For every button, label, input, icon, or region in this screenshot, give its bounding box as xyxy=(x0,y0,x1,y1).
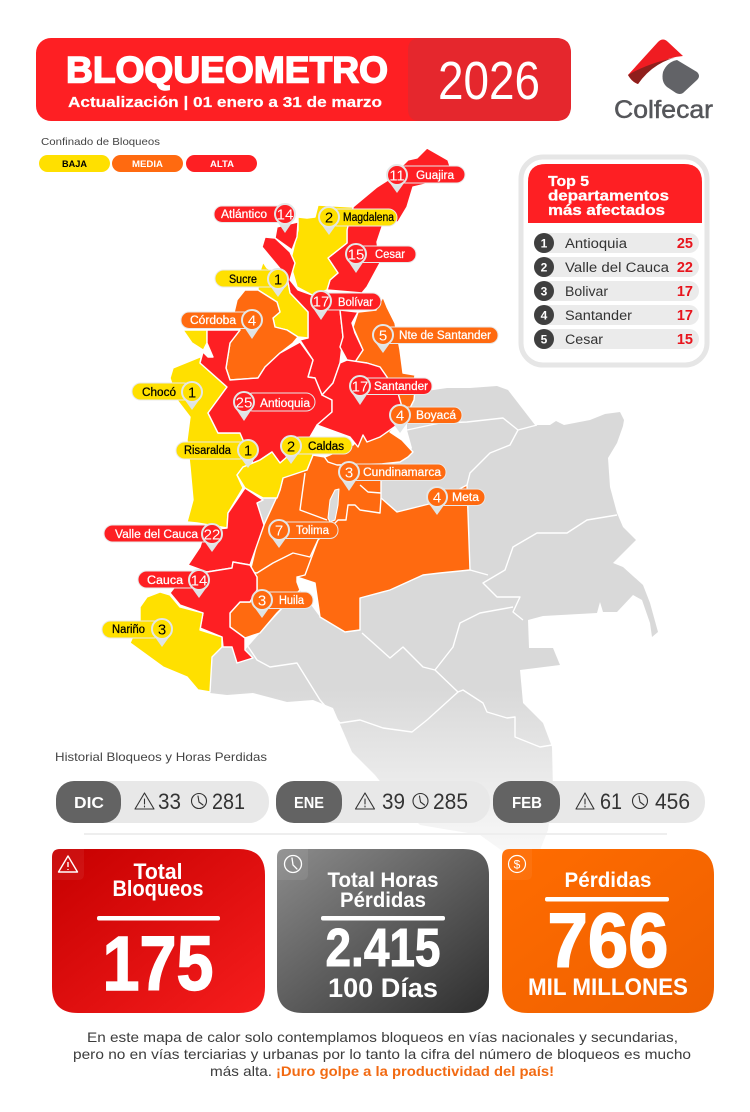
history: FEB xyxy=(493,781,705,823)
icon: clock xyxy=(284,856,302,872)
department: Nariño xyxy=(130,592,222,692)
footer note xyxy=(73,1029,691,1079)
department: Magdalena xyxy=(290,205,353,295)
row: Antioquia: 25 xyxy=(677,236,693,252)
legend item: baja xyxy=(39,155,110,172)
pin: Nariño: 3 xyxy=(158,622,166,638)
pin: Risaralda xyxy=(176,440,258,468)
card: perdidas: Pérdidas xyxy=(564,869,652,892)
row: Bolivar: 3 xyxy=(541,284,548,298)
pin: Nte de Santander: Nte de Santander xyxy=(399,330,491,342)
department: Guajira xyxy=(352,148,450,222)
icon: warning xyxy=(576,793,594,809)
row: Antioquia xyxy=(534,233,699,253)
card: total horas perdidas: Pérdidas xyxy=(340,889,426,912)
pin: Risaralda: Risaralda xyxy=(184,445,232,457)
row: Cesar: 5 xyxy=(541,332,548,346)
department: Bolívar xyxy=(262,237,343,395)
department: Atlántico xyxy=(275,222,298,250)
pin: Chocó xyxy=(132,382,202,410)
pin: Nte de Santander xyxy=(373,325,498,353)
pin: Guajira xyxy=(387,165,465,193)
pin: Valle del Cauca: Valle del Cauca xyxy=(115,529,199,541)
pin: Cundinamarca xyxy=(339,462,446,491)
row: Santander xyxy=(534,305,699,325)
history: DIC: 33 xyxy=(158,789,181,814)
row: Antioquia: Antioquia xyxy=(565,236,628,251)
history: DIC xyxy=(56,781,269,823)
pin: Magdalena: Magdalena xyxy=(343,212,395,224)
pin: Tolima: Tolima xyxy=(296,525,330,537)
pin: Valle del Cauca: 22 xyxy=(204,526,220,544)
legend item: media xyxy=(112,155,183,172)
row: Cesar: 15 xyxy=(677,332,693,348)
pin: Guajira: Guajira xyxy=(416,170,455,182)
history: ENE: ENE xyxy=(294,795,324,812)
row: Cesar xyxy=(534,329,699,349)
row: Bolivar: Bolivar xyxy=(565,284,609,299)
pin: Huila: Huila xyxy=(279,595,305,607)
history: FEB: 61 xyxy=(600,789,622,814)
history: FEB: FEB xyxy=(512,795,542,812)
history: ENE xyxy=(276,781,490,823)
year: 2026 xyxy=(438,51,540,111)
pin: Boyacá: 4 xyxy=(396,408,404,424)
pin: Atlántico: 14 xyxy=(277,206,293,224)
department: Risaralda and Caldas xyxy=(237,437,313,498)
value: 766: 766 xyxy=(548,898,668,984)
footer note: pero no en vías terciarias y urbanas por lo tanto la cifra del número de bloqueos es mucho xyxy=(73,1046,691,1062)
row: Cesar: Cesar xyxy=(565,332,604,347)
grey departments without data xyxy=(210,386,658,875)
pin: Caldas xyxy=(281,436,352,464)
icon: warning xyxy=(356,793,374,809)
row: Bolivar: 17 xyxy=(677,284,693,300)
pin: Cundinamarca: 3 xyxy=(345,464,353,482)
pin: Santander xyxy=(350,376,432,405)
department: Cesar xyxy=(327,222,384,293)
top 5 header: más afectados xyxy=(548,202,665,219)
panel: top 5 departments xyxy=(521,157,707,365)
history: FEB: 456 xyxy=(655,789,690,814)
pin: Santander: 17 xyxy=(352,378,368,396)
top 5 header: departamentos xyxy=(548,188,669,204)
pin: Santander: Santander xyxy=(374,381,428,393)
row: Santander: 4 xyxy=(541,308,548,322)
icon: money xyxy=(508,856,526,872)
pin: Nariño xyxy=(102,619,172,647)
row: Santander: 17 xyxy=(677,308,693,324)
card: total bloqueos: Bloqueos xyxy=(112,876,204,901)
top 5 header xyxy=(528,164,702,223)
history heading: Historial Bloqueos y Horas Perdidas xyxy=(55,750,267,764)
top 5 header: Top 5 xyxy=(548,173,589,190)
pin: Meta xyxy=(427,487,485,515)
pin: Cesar xyxy=(346,244,416,273)
pin: Antioquia xyxy=(234,392,315,421)
pin: Antioquia: Antioquia xyxy=(260,398,311,410)
legend item: alta xyxy=(186,155,257,172)
row: Valle del Cauca: Valle del Cauca xyxy=(565,260,670,275)
department: Magdalena Medio xyxy=(340,310,363,362)
history: ENE: 285 xyxy=(433,789,468,814)
pin: Guajira: 11 xyxy=(389,168,405,184)
card: total bloqueos xyxy=(52,849,265,1013)
department: Valle del Cauca xyxy=(188,488,264,572)
row: Bolivar xyxy=(534,281,699,301)
value: 100 días: 100 Días xyxy=(328,973,438,1003)
departments: Boyacá, Cundinamarca, Tolima, Huila, Meta xyxy=(230,390,470,638)
history: ENE: 39 xyxy=(382,789,405,814)
logo: Colfecar: Colfecar xyxy=(614,96,713,124)
pin: Córdoba: Córdoba xyxy=(190,315,237,327)
pin: Nte de Santander: 5 xyxy=(379,328,387,344)
pin: Córdoba xyxy=(181,310,262,339)
pin: Antioquia: 25 xyxy=(236,394,252,412)
pin: Cauca: 14 xyxy=(191,572,207,590)
pin: Tolima: 7 xyxy=(275,522,283,540)
row: Valle del Cauca: 22 xyxy=(677,260,693,276)
value: 175: 175 xyxy=(102,921,214,1007)
subtitle: date range: Actualización | 01 enero a 31 de marzo xyxy=(68,94,382,111)
pin: Sucre: Sucre xyxy=(229,274,257,286)
department: Santander xyxy=(317,360,402,447)
pin: Cundinamarca: Cundinamarca xyxy=(363,467,442,479)
row: Valle del Cauca: 2 xyxy=(541,260,548,274)
pin: Córdoba: 4 xyxy=(248,312,256,330)
value: 2.415: 2.415 xyxy=(326,918,440,978)
icon: clock xyxy=(192,794,206,808)
legend title: Confinado de Bloqueos xyxy=(41,136,160,148)
pin: Magdalena: 2 xyxy=(325,210,333,226)
department: Antioquia xyxy=(200,330,332,463)
row: Santander: Santander xyxy=(565,308,633,323)
row: Antioquia: 1 xyxy=(541,236,548,250)
department: Nte de Santander xyxy=(353,297,415,393)
row: Valle del Cauca xyxy=(534,257,699,277)
pin: Boyacá: Boyacá xyxy=(416,410,457,422)
pin: Chocó: Chocó xyxy=(142,387,176,399)
card: total bloqueos: Total xyxy=(134,859,182,884)
pin: Cesar: Cesar xyxy=(375,249,405,261)
department: Córdoba xyxy=(226,290,298,380)
icon: money: $ xyxy=(514,858,521,872)
map pins xyxy=(102,165,498,647)
icon: clock xyxy=(413,794,428,808)
history: DIC: DIC xyxy=(74,795,104,812)
pin: Boyacá xyxy=(390,405,462,433)
pin: Meta: 4 xyxy=(433,490,441,506)
pin: Bolívar: 17 xyxy=(313,294,329,310)
pin: Bolívar: Bolívar xyxy=(338,297,373,309)
logo: Colfecar xyxy=(614,40,713,124)
card: total horas perdidas: Total Horas xyxy=(328,869,438,892)
pin: Sucre: 1 xyxy=(274,272,282,288)
pin: Chocó: 1 xyxy=(188,384,196,402)
pin: Atlántico xyxy=(214,204,295,233)
pin: Sucre xyxy=(215,269,288,297)
value: mil millones: MIL MILLONES xyxy=(528,974,688,1001)
legend item: alta: ALTA xyxy=(210,159,235,169)
title: BLOQUEOMETRO xyxy=(66,50,388,90)
icon: warning xyxy=(135,793,154,809)
pin: Nariño: Nariño xyxy=(112,624,145,636)
icon: warning xyxy=(58,856,78,872)
card: perdidas xyxy=(502,849,714,1013)
pin: Bolívar xyxy=(311,291,381,320)
legend xyxy=(39,136,257,172)
header banner xyxy=(36,38,571,121)
footer note: En este mapa de calor solo contemplamos bloqueos en vías nacionales y secundarias, xyxy=(87,1029,678,1045)
pin: Magdalena xyxy=(319,207,397,235)
pin: Huila xyxy=(252,590,313,618)
card: total horas perdidas xyxy=(277,849,489,1013)
legend item: media: MEDIA xyxy=(132,159,164,169)
icon: clock xyxy=(632,794,648,808)
map of Colombia xyxy=(130,148,658,875)
history: DIC: 281 xyxy=(212,789,245,814)
footer note: ¡Duro golpe a la productividad del país! xyxy=(276,1063,554,1079)
pin: Cauca: Cauca xyxy=(147,575,184,587)
department: Cauca xyxy=(170,562,257,663)
legend item: baja: BAJA xyxy=(62,159,87,169)
pin: Huila: 3 xyxy=(258,592,266,610)
pin: Valle del Cauca xyxy=(104,524,222,552)
pin: Meta: Meta xyxy=(452,492,480,504)
pin: Cauca xyxy=(138,570,209,598)
pin: Risaralda: 1 xyxy=(244,442,252,460)
pin: Cesar: 15 xyxy=(348,246,364,264)
department: Chocó xyxy=(170,330,253,528)
footer note: más alta. xyxy=(210,1063,272,1079)
pin: Caldas: Caldas xyxy=(308,441,344,453)
pin: Atlántico: Atlántico xyxy=(221,209,267,221)
pin: Caldas: 2 xyxy=(287,438,295,456)
department: Sucre xyxy=(258,262,308,338)
pin: Tolima xyxy=(269,520,338,548)
